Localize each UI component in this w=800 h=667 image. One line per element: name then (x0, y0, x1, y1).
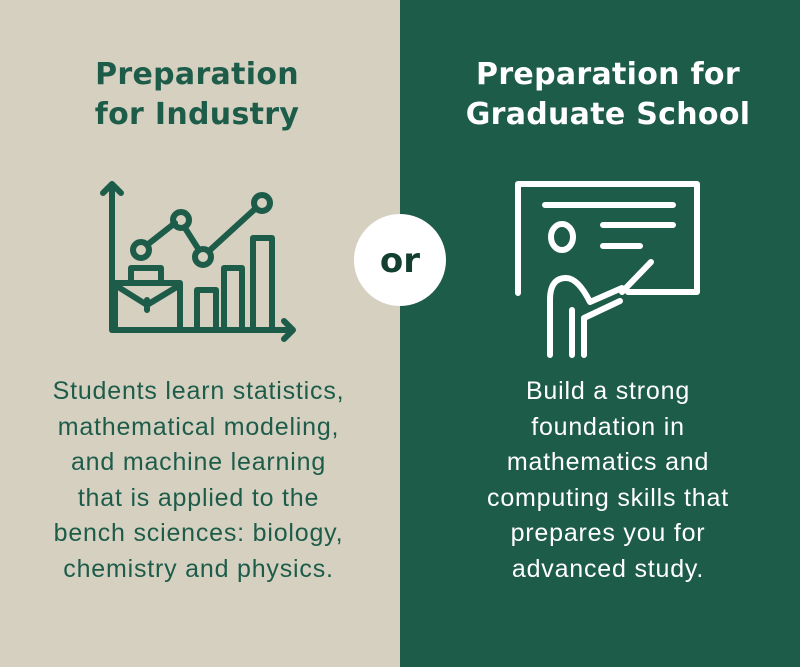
heading: graduate school: Preparation for (476, 57, 740, 92)
icon: chart with briefcase (103, 184, 293, 339)
text block: industry (53, 377, 344, 582)
heading: industry: Preparation (95, 57, 299, 92)
panel: industry (0, 0, 400, 667)
text block: industry: chemistry and physics. (63, 554, 334, 582)
text block: graduate school (487, 377, 729, 582)
text block: graduate school: prepares you for (511, 519, 705, 547)
heading: graduate school: Graduate School (466, 97, 750, 132)
text block: industry: mathematical modeling, (58, 412, 339, 440)
heading: industry: for Industry (95, 97, 299, 132)
text block: industry: bench sciences: biology, (54, 519, 343, 547)
text block: industry: that is applied to the (78, 484, 319, 512)
text block: industry: and machine learning (71, 448, 326, 476)
text block: industry: Students learn statistics, (53, 377, 344, 405)
text block: graduate school: advanced study. (512, 554, 704, 582)
text block: graduate school: computing skills that (487, 484, 729, 512)
text block: graduate school: foundation in (531, 412, 685, 440)
panel: graduate school (400, 0, 800, 667)
heading: graduate school (466, 57, 750, 132)
text block: graduate school: mathematics and (507, 448, 709, 476)
icon: teacher at board (518, 184, 697, 355)
icon: or circle: or (380, 241, 420, 281)
text block: graduate school: Build a strong (526, 377, 690, 405)
icon: or circle (354, 214, 446, 306)
heading: industry (95, 57, 299, 132)
